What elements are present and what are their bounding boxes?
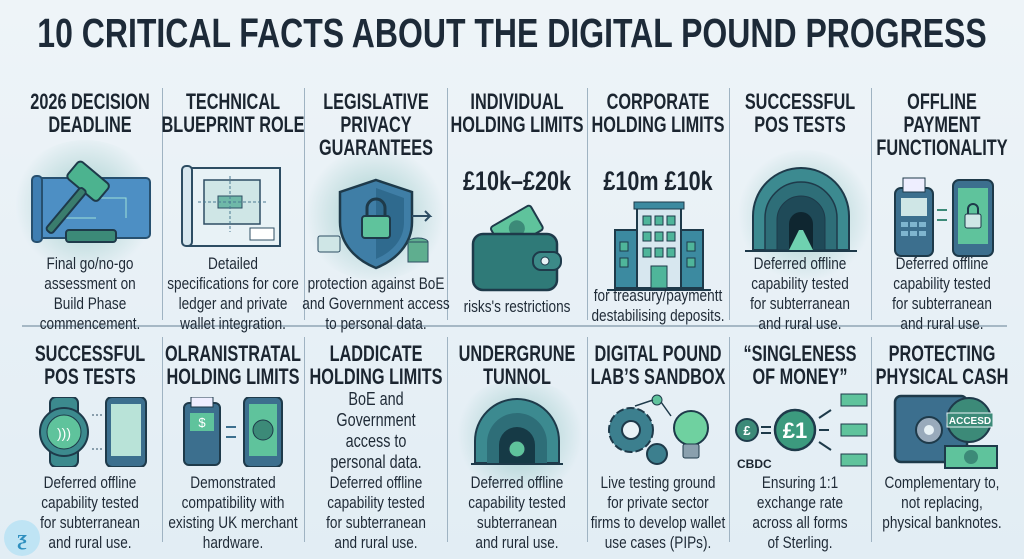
text	[591, 286, 725, 325]
heading	[695, 342, 905, 388]
heading: DIGITAL POUND	[595, 341, 721, 366]
icon: pound exchange: CBDC	[737, 457, 772, 471]
text: and Government access	[302, 294, 449, 313]
logo badge: ƺ	[17, 525, 27, 550]
text	[686, 473, 914, 553]
text: Complementary to,	[885, 473, 999, 492]
heading	[35, 341, 145, 389]
text: Detailed	[208, 254, 258, 273]
heading: POS TESTS	[44, 364, 136, 389]
text	[892, 254, 992, 333]
panel: singleness of money	[729, 342, 871, 547]
icon: pound exchange: £1	[783, 418, 807, 443]
text: data access	[330, 389, 421, 472]
text: firms to develop wallet	[591, 513, 725, 532]
icon: gears and bulb	[599, 392, 719, 467]
logo badge	[4, 520, 40, 556]
panel: technical blueprint role	[162, 89, 304, 333]
icon: terminal and phone: $	[198, 415, 206, 430]
heading: SUCCESSFUL	[745, 89, 855, 114]
text: specifications for core	[167, 274, 299, 293]
heading: UNDERGRUNE	[459, 341, 575, 366]
heading: FUNCTIONALITY	[876, 135, 1008, 160]
text: protection against BoE	[307, 274, 444, 293]
panel: laddicate holding limits	[309, 341, 442, 552]
heading: 2026 DECISION	[30, 89, 150, 114]
icon: tunnel	[471, 397, 563, 467]
text	[405, 473, 629, 553]
heading: OF MONEY”	[753, 364, 847, 389]
text: physical banknotes.	[882, 513, 1002, 532]
text: Deferred offline	[44, 473, 136, 492]
panel: successful pos tests (tunnel)	[745, 89, 857, 333]
heading	[451, 89, 583, 137]
heading: HOLDING LIMITS	[592, 112, 724, 137]
panel: undergrune tunnol	[459, 341, 575, 552]
text: for subterranean	[40, 513, 140, 532]
heading: CORPORATE	[607, 89, 709, 114]
icon: safe: ACCESD	[949, 416, 991, 427]
heading: SUCCESSFUL	[35, 341, 145, 366]
text	[40, 254, 140, 333]
heading: PHYSICAL CASH	[876, 364, 1008, 389]
icon: blueprint	[181, 165, 281, 247]
heading: INDIVIDUAL	[470, 89, 564, 114]
text	[40, 473, 140, 552]
text	[302, 274, 450, 333]
heading: OFFLINE	[907, 89, 977, 114]
text: compatibility with	[182, 493, 284, 512]
heading	[413, 342, 621, 388]
text: Deferred offline	[471, 473, 563, 492]
heading	[162, 89, 304, 137]
text: existing UK merchant	[168, 513, 298, 532]
icon: shield lock	[318, 178, 432, 270]
icon: pound exchange	[733, 392, 869, 472]
text: for private sector	[607, 493, 709, 512]
text: Final go/no-go	[47, 254, 133, 273]
text: not replacing,	[901, 493, 983, 512]
text: commencement.	[40, 314, 140, 333]
text: Ensuring 1:1	[762, 473, 838, 492]
text	[326, 473, 426, 552]
icon: safe	[891, 392, 1001, 472]
heading	[876, 89, 1008, 160]
text: across all forms	[752, 513, 848, 532]
text: and rural use.	[758, 314, 842, 333]
title: 10 CRITICAL FACTS ABOUT THE DIGITAL POUND PROGRESS	[37, 10, 987, 56]
icon: terminal and phone	[894, 178, 994, 257]
text: ledger and private	[179, 294, 287, 313]
text: Deferred offline	[754, 254, 846, 273]
heading: LAB’S SANDBOX	[591, 364, 725, 389]
figure: limit amount: £10m £10k	[603, 166, 713, 196]
text	[168, 473, 298, 552]
heading	[837, 342, 1024, 388]
text: data access: personal data.	[330, 452, 421, 472]
panel: legislative privacy guarantees	[302, 89, 450, 333]
panel: 2026 decision deadline	[30, 89, 151, 333]
text: capability tested	[41, 493, 139, 512]
icon: watch and phone: )))	[57, 425, 71, 441]
text: Deferred offline	[329, 473, 422, 492]
panel: digital pound lab's sandbox	[587, 342, 729, 547]
heading: GUARANTEES	[319, 135, 432, 160]
heading: “SINGLENESS	[743, 341, 857, 366]
text: risks's restrictions	[464, 297, 570, 316]
text: assessment on	[44, 274, 136, 293]
heading: PROTECTING	[889, 341, 995, 366]
text: and rural use.	[48, 533, 132, 552]
heading: HOLDING LIMITS	[309, 364, 442, 389]
text: capability tested	[751, 274, 849, 293]
text: capability tested	[893, 274, 991, 293]
text: and rural use.	[334, 533, 417, 552]
heading	[309, 341, 442, 389]
heading: TECHNICAL	[186, 89, 280, 114]
heading: OLRANISTRATAL	[165, 341, 301, 366]
heading	[745, 89, 855, 137]
text: capability tested	[468, 493, 566, 512]
panel: successful pos tests (watch)	[35, 341, 147, 552]
heading: HOLDING LIMITS	[451, 112, 583, 137]
icon: pound exchange: £	[743, 423, 751, 438]
text: Live testing ground	[601, 473, 715, 492]
heading: BLUEPRINT ROLE	[162, 112, 304, 137]
icon: tunnel	[745, 167, 857, 252]
text: Deferred offline	[896, 254, 988, 273]
figure: limit amount: £10k–£20k	[463, 166, 571, 196]
text: data access: access to	[345, 431, 406, 451]
text: wallet integration.	[180, 314, 286, 333]
text	[750, 254, 850, 333]
text: Demonstrated	[190, 473, 276, 492]
panel: olranistratal holding limits	[165, 341, 301, 552]
panel: individual holding limits	[451, 89, 583, 316]
text	[828, 473, 1024, 533]
icon: building	[607, 202, 711, 291]
text: for treasury/paymentt	[594, 286, 722, 305]
text: exchange rate	[757, 493, 843, 512]
panel: protecting physical cash	[871, 342, 1013, 547]
text: for subterranean	[750, 294, 850, 313]
text: Build Phase	[54, 294, 126, 313]
heading	[319, 89, 432, 160]
text	[544, 473, 772, 553]
text: destabilising deposits.	[591, 306, 725, 325]
icon: wallet	[472, 204, 562, 292]
text: hardware.	[203, 533, 263, 552]
icon: watch and phone	[39, 397, 147, 467]
text	[167, 254, 299, 333]
heading: DEADLINE	[48, 112, 132, 137]
text: subterranean	[477, 513, 557, 532]
panel: offline payment functionality	[876, 89, 1008, 333]
heading: PRIVACY	[340, 112, 411, 137]
icon: gavel on blueprint	[31, 160, 151, 243]
text: for subterranean	[326, 513, 425, 532]
heading: HOLDING LIMITS	[167, 364, 299, 389]
heading: TUNNOL	[483, 364, 551, 389]
text: use cases (PIPs).	[605, 533, 711, 552]
text: for subterranean	[892, 294, 992, 313]
heading	[165, 341, 301, 389]
heading	[592, 89, 724, 137]
text: to personal data.	[325, 314, 426, 333]
heading: LEGISLATIVE	[323, 89, 428, 114]
text: capability tested	[327, 493, 424, 512]
text: and rural use.	[900, 314, 984, 333]
heading	[553, 342, 763, 388]
icon: terminal and phone	[183, 397, 283, 467]
heading	[30, 89, 150, 137]
panel: corporate holding limits	[591, 89, 725, 325]
text: data access: BoE and	[348, 389, 403, 409]
text: and rural use.	[475, 533, 559, 552]
heading: PAYMENT	[904, 112, 980, 137]
text: of Sterling.	[767, 533, 832, 552]
heading: POS TESTS	[754, 112, 846, 137]
heading: LADDICATE	[329, 341, 422, 366]
text: data access: Government	[336, 410, 415, 430]
